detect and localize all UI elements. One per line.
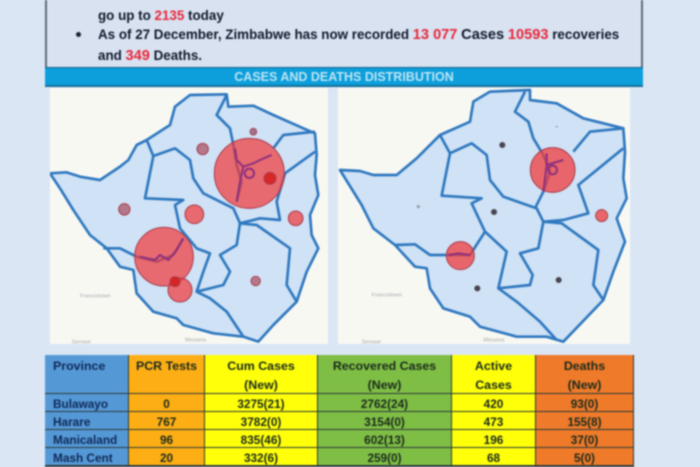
table row: Manicaland: 196 [484, 433, 503, 447]
map labels: deaths map place names: Messina [483, 338, 505, 344]
map labels: cases map place names: Messina [185, 338, 207, 344]
table header: (New) [368, 378, 401, 392]
table row: Manicaland: 835(46) [241, 433, 281, 447]
panel: cases map [49, 88, 328, 344]
table header: Active [475, 359, 512, 373]
table header [44, 354, 634, 394]
map: Zimbabwe provinces, cases [50, 94, 318, 342]
text: second bullet line one: As of 27 December, Zimbabwe has now recorded 13 077 Cases 10593 recoveries [98, 27, 619, 43]
text: first bullet continuation: go up to 2135 today [98, 8, 224, 23]
map labels: deaths map place names: Francistown [372, 293, 402, 299]
table row: Bulawayo: Bulawayo [53, 397, 108, 411]
table row: Bulawayo: 2762(24) [361, 397, 408, 411]
table header: Cases [475, 378, 512, 392]
table row: Manicaland: 37(0) [571, 433, 598, 447]
map: Zimbabwe provinces, deaths [340, 90, 627, 342]
table row: Harare: 473 [484, 415, 503, 429]
table row: Manicaland: 96 [160, 433, 173, 447]
table row: Mash Cent: 259(0) [367, 451, 402, 465]
table header: Recovered Cases [333, 359, 436, 373]
table row: Harare [44, 411, 634, 430]
table row: Mash Cent [44, 447, 634, 466]
table row: Harare: 767 [157, 415, 176, 429]
table: provincial figures [45, 355, 634, 467]
table header: PCR Tests [136, 359, 197, 373]
table row: Mash Cent: 20 [160, 451, 173, 465]
table row: Manicaland: 602(13) [364, 433, 405, 447]
table row: Mash Cent: 68 [487, 451, 500, 465]
heading: cases and deaths distribution: CASES AND DEATHS DISTRIBUTION [234, 70, 454, 84]
table header: Province [53, 359, 105, 373]
table row: Harare: Harare [53, 415, 90, 429]
dots: low death counts [417, 126, 562, 291]
map labels: cases map place names: Francistown [80, 294, 110, 300]
panel: deaths map [338, 88, 630, 344]
table row: Mash Cent: 5(0) [574, 451, 595, 465]
map labels: cases map place names [72, 294, 207, 345]
panel: key points text box [45, 0, 643, 68]
table row: Bulawayo: 0 [163, 397, 170, 411]
table row: Bulawayo: 93(0) [571, 397, 598, 411]
text: second bullet line two: and 349 Deaths. [98, 48, 202, 64]
table row: Mash Cent: 332(6) [244, 451, 278, 465]
city boundaries: Harare and Bulawayo, deaths [448, 153, 563, 255]
circles: cases by province [119, 128, 303, 302]
city boundaries: Harare and Bulawayo [140, 148, 272, 260]
table row: Mash Cent: Mash Cent [53, 451, 113, 465]
icon: bullet [76, 32, 81, 37]
circles: deaths by province [446, 148, 608, 270]
table row: Bulawayo: 3275(21) [237, 397, 285, 411]
table row: Bulawayo: 420 [484, 397, 503, 411]
table row: Harare: 155(8) [567, 415, 602, 429]
heading: cases and deaths distribution [45, 67, 643, 87]
table row: Harare: 3154(0) [364, 415, 405, 429]
table row: Manicaland [44, 429, 634, 448]
table header: Deaths [564, 359, 605, 373]
table header: Cum Cases [227, 359, 295, 373]
table row: Harare: 3782(0) [241, 415, 281, 429]
table header: (New) [568, 378, 601, 392]
table row: Bulawayo [44, 393, 634, 412]
table header: (New) [244, 378, 278, 392]
map labels: deaths map place names [362, 293, 505, 345]
table row: Manicaland: Manicaland [53, 433, 117, 447]
